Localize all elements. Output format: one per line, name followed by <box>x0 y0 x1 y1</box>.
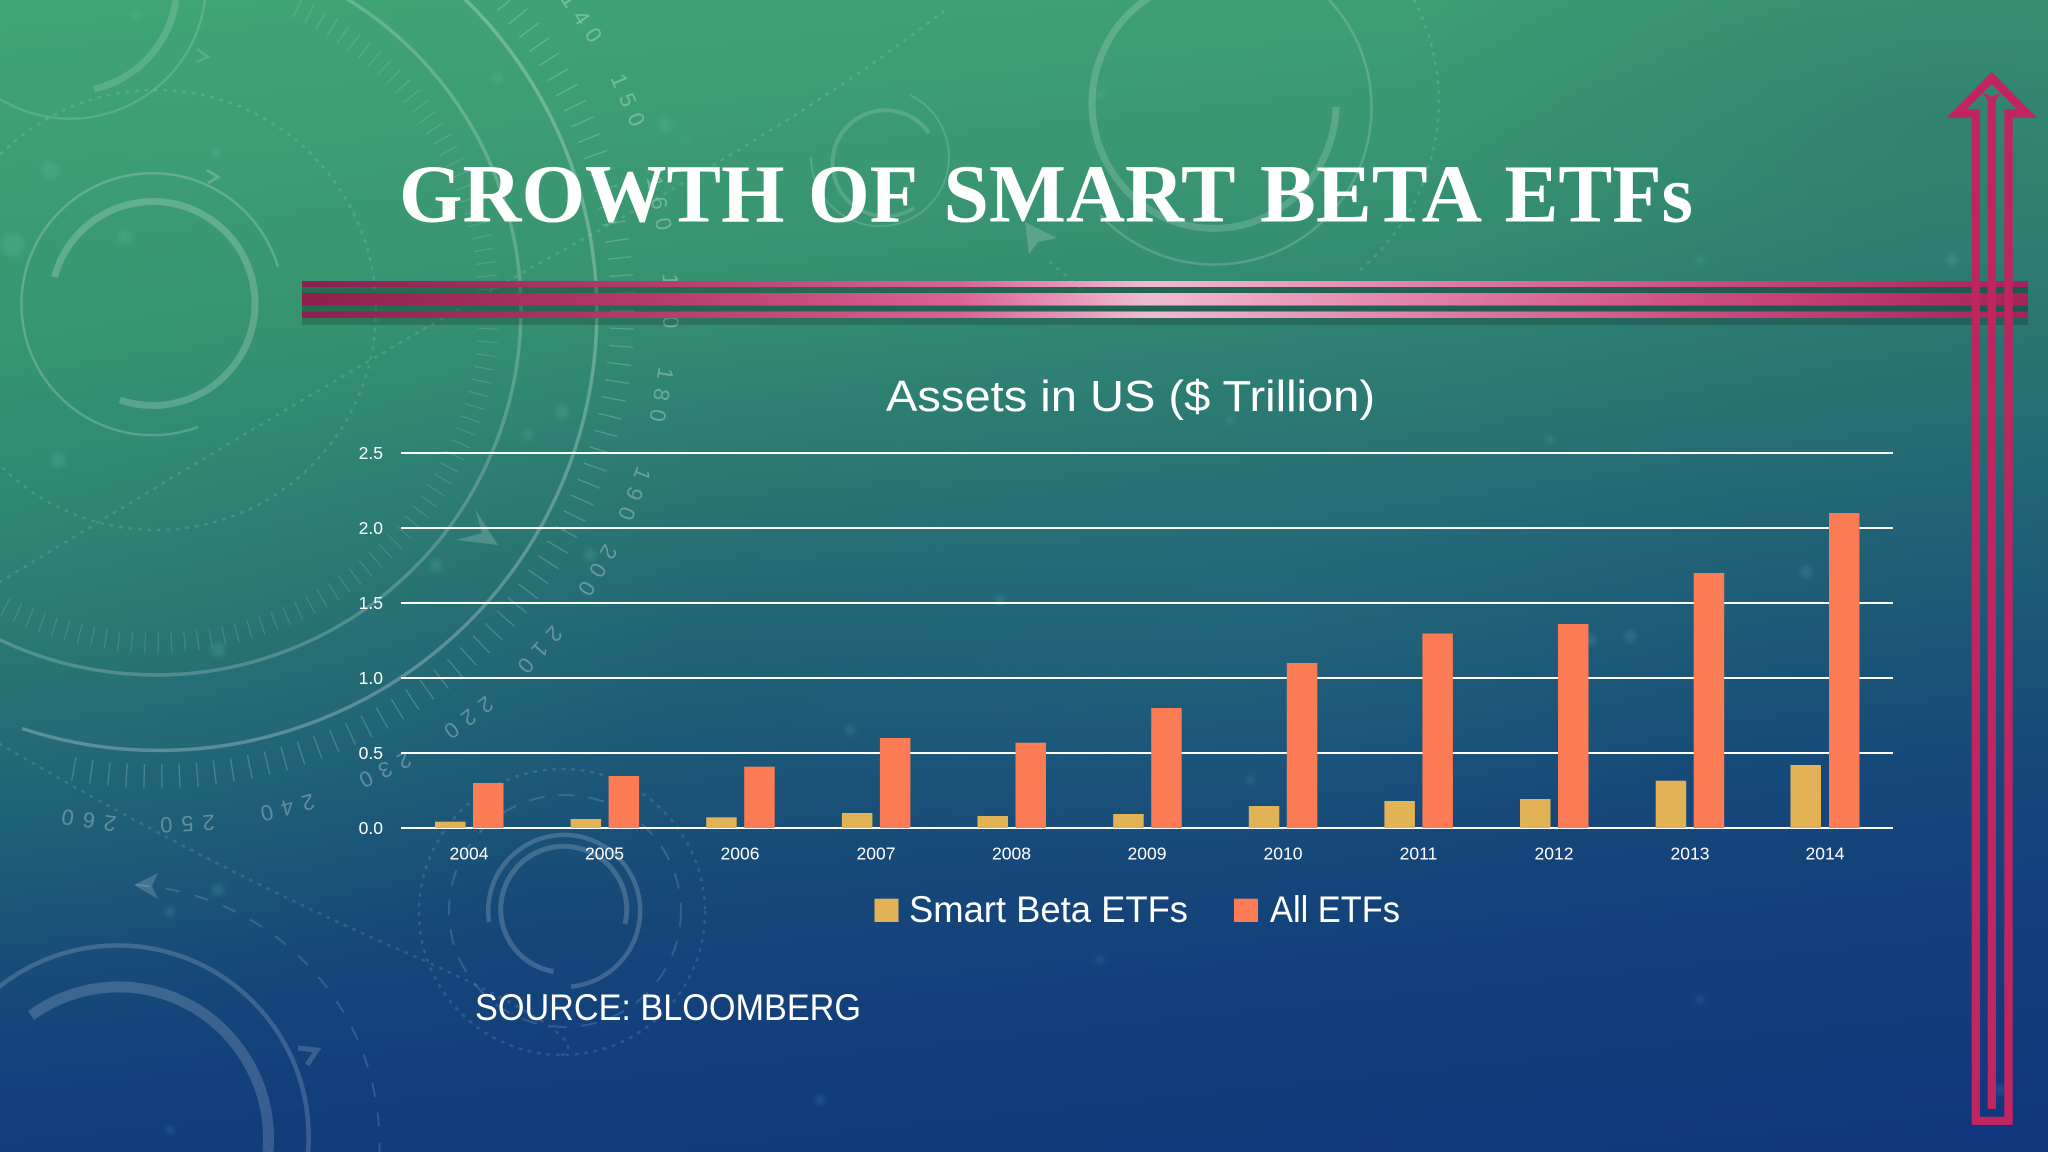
dial numbers: 250 <box>150 810 215 838</box>
x axis labels: 2009 <box>1128 844 1166 864</box>
dial numbers: 180 <box>643 365 679 433</box>
y axis labels: 2.5 <box>359 443 383 463</box>
x axis labels: 2011 <box>1400 844 1437 864</box>
y axis labels <box>359 443 383 838</box>
x axis labels: 2012 <box>1535 844 1573 864</box>
dial numbers: 220 <box>432 691 498 749</box>
dial numbers: 200 <box>568 540 622 608</box>
x axis labels: 2007 <box>857 844 895 864</box>
y axis labels: 0.5 <box>359 743 383 763</box>
title: SMART <box>944 148 1236 240</box>
bar chart: assets in US <box>359 443 1893 864</box>
series: Smart Beta ETFs <box>435 765 1821 828</box>
decorative dial and HUD circles <box>0 0 1439 1152</box>
x axis labels <box>450 844 1845 864</box>
small ring gauge under title <box>811 95 949 226</box>
y axis labels: 1.0 <box>359 668 383 688</box>
source note: SOURCE: BLOOMBERG <box>475 987 861 1028</box>
legend: All ETFs <box>1270 889 1400 930</box>
dotted rings and paths <box>0 0 1439 1055</box>
left ring gauge <box>21 170 278 435</box>
dial numbers: 150 <box>605 70 654 138</box>
legend: Smart Beta ETFs <box>909 889 1188 930</box>
x axis labels: 2013 <box>1671 844 1709 864</box>
dial numbers: 160 <box>642 174 679 241</box>
legend <box>874 889 1400 930</box>
y axis labels: 0.0 <box>359 818 383 838</box>
title: OF <box>808 148 918 240</box>
title <box>399 148 1693 240</box>
x axis labels: 2010 <box>1264 844 1303 864</box>
dial numbers <box>51 0 683 838</box>
dial numbers: 190 <box>610 464 656 532</box>
top-centre ring gauge <box>1092 0 1372 265</box>
title: BETA <box>1260 148 1482 240</box>
series: All ETFs <box>473 513 1860 828</box>
big dial rings <box>0 0 597 750</box>
decorative arrowheads <box>134 222 1057 899</box>
gridlines <box>401 452 1893 829</box>
title: ETFs <box>1504 148 1693 240</box>
bottom-left ring gauge <box>0 885 380 1152</box>
x axis labels: 2005 <box>585 844 624 864</box>
dial numbers: 230 <box>347 746 415 797</box>
x axis labels: 2004 <box>450 844 489 864</box>
chart title: Assets in US ($ Trillion) <box>886 372 1375 421</box>
dial numbers: 210 <box>506 621 567 685</box>
top-left ring gauge <box>0 0 208 119</box>
title: GROWTH <box>399 148 784 240</box>
vertical up arrow <box>1947 72 2037 1125</box>
y axis labels: 2.0 <box>359 518 383 538</box>
x axis labels: 2014 <box>1806 844 1845 864</box>
dial numbers: 240 <box>249 789 317 829</box>
y axis labels: 1.5 <box>359 593 383 613</box>
x axis labels: 2006 <box>721 844 759 864</box>
dial numbers: 260 <box>51 803 118 836</box>
dial numbers: 170 <box>658 274 683 337</box>
lower ring gauge behind labels <box>449 795 681 1027</box>
horizontal triple-stripe divider <box>302 281 2028 325</box>
dial ticks <box>0 0 622 776</box>
x axis labels: 2008 <box>992 844 1031 864</box>
